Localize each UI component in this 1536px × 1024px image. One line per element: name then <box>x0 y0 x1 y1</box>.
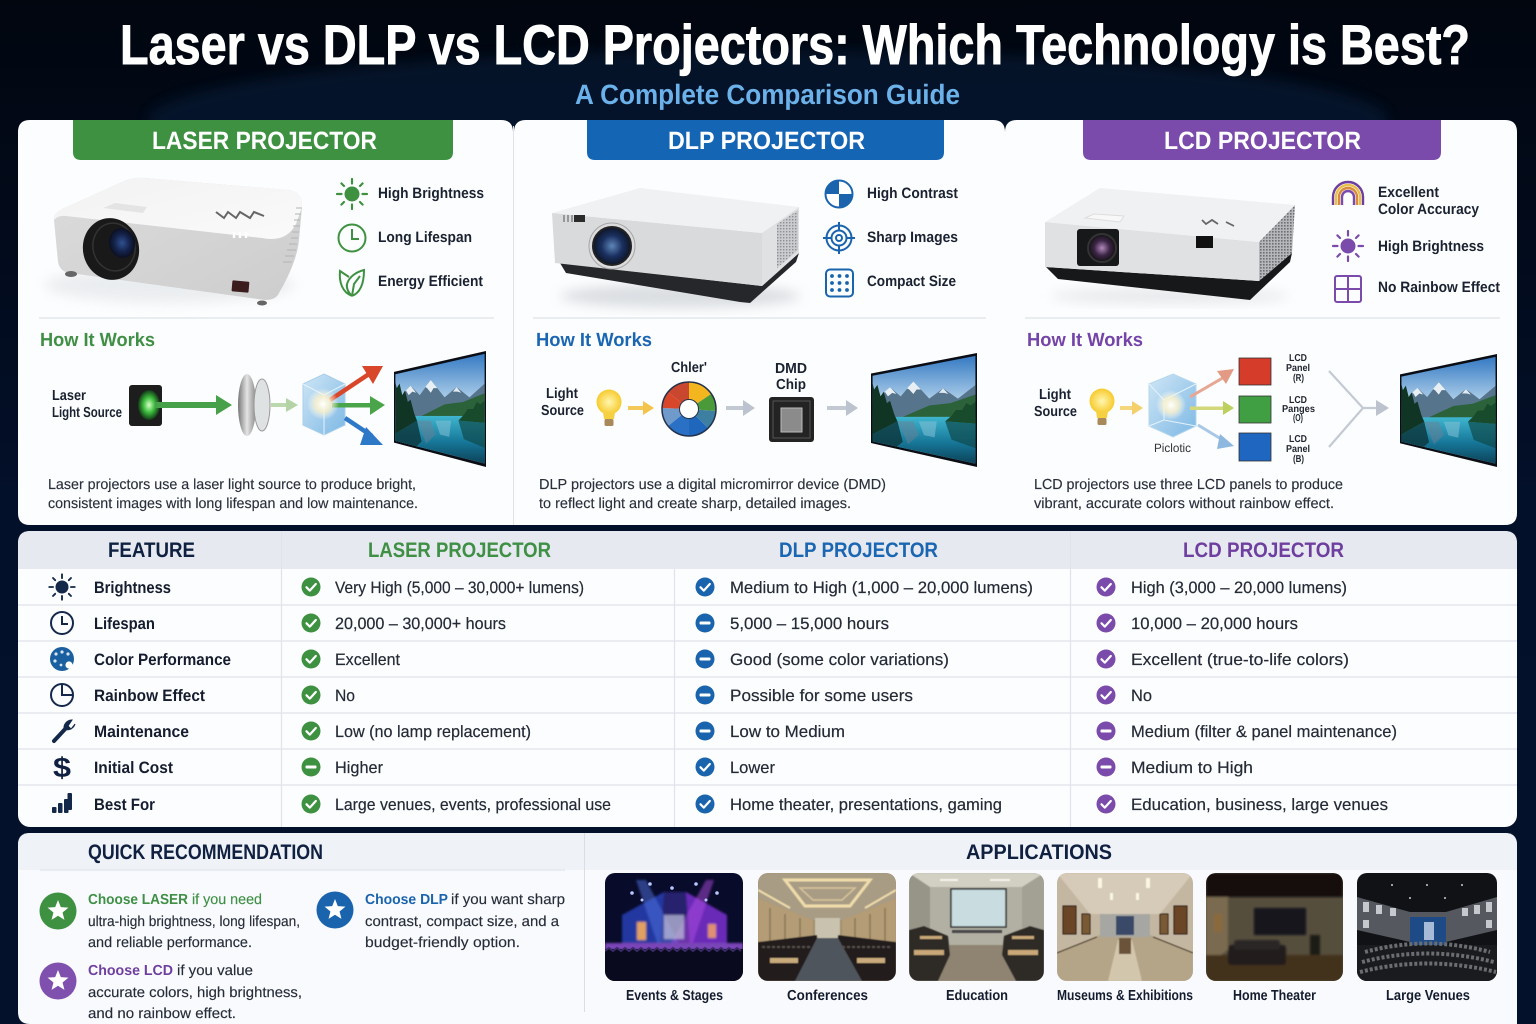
application: events and stages: Events & Stages <box>626 988 723 1004</box>
row: brightness <box>49 574 1347 600</box>
text: laser description: consistent images with long lifespan and low maintenance. <box>48 496 418 512</box>
recommendation: dlp <box>316 892 565 951</box>
feature: long lifespan <box>338 224 472 252</box>
recommendation: laser: if you need <box>192 892 262 908</box>
screen: mountain lake image <box>871 353 977 467</box>
diagram: lcd light path: LCD <box>1289 395 1307 406</box>
feature: long lifespan: Long Lifespan <box>378 229 472 246</box>
row: initial cost <box>53 752 1253 783</box>
recommendation: lcd: Choose LCD <box>88 963 173 979</box>
row: initial cost: Lower <box>730 759 775 777</box>
diagram: lcd light path: Light <box>1039 387 1071 403</box>
row: initial cost: Medium to High <box>1131 759 1253 777</box>
feature: high brightness <box>1333 231 1484 261</box>
image: laser projector <box>45 178 302 306</box>
comparison table <box>18 531 1517 827</box>
feature: excellent color accuracy: Color Accuracy <box>1378 201 1480 218</box>
row: rainbow effect: No <box>335 687 355 705</box>
recommendation: laser: ultra-high brightness, long lifespan, <box>88 914 300 930</box>
application: museums and exhibitions: Museums & Exhibitions <box>1057 988 1193 1004</box>
heading: lcd projector: LCD PROJECTOR <box>1164 127 1361 155</box>
diagram: dlp light path: Source <box>541 403 584 419</box>
application: large venues <box>1357 873 1497 1004</box>
table header row: DLP PROJECTOR <box>779 539 938 562</box>
screen: mountain lake image <box>394 351 486 467</box>
text: lcd description: LCD projectors use three LCD panels to produce <box>1034 477 1343 493</box>
row: color performance: Excellent <box>335 651 400 669</box>
row: brightness: Very High (5,000 – 30,000+ lumens) <box>335 579 584 597</box>
application: museums and exhibitions <box>1057 873 1193 1004</box>
application: home theater: Home Theater <box>1233 988 1316 1004</box>
heading: dlp projector <box>587 120 944 160</box>
text: lcd description: vibrant, accurate colors without rainbow effect. <box>1034 496 1334 512</box>
image: lcd projector <box>1045 188 1295 304</box>
row: maintenance: Maintenance <box>94 723 189 741</box>
row: rainbow effect: Rainbow Effect <box>94 687 205 705</box>
row: rainbow effect <box>51 684 1152 706</box>
panel: dlp projector <box>514 120 1005 525</box>
recommendation: laser: Choose LASER <box>88 892 188 908</box>
table header row: LASER PROJECTOR <box>368 539 551 562</box>
diagram: lcd light path: Panel <box>1286 363 1310 374</box>
row: lifespan: Lifespan <box>94 615 155 633</box>
panel: lcd projector <box>1005 120 1517 525</box>
row: initial cost: $ <box>53 752 71 783</box>
feature: high contrast <box>826 180 958 208</box>
diagram: lcd light path: LCD <box>1289 434 1307 445</box>
text: laser description <box>48 477 418 512</box>
application: conferences <box>758 873 896 1004</box>
text: dlp description <box>539 477 886 512</box>
diagram: dlp light path: Chip <box>776 377 806 393</box>
feature: high contrast: High Contrast <box>867 185 958 202</box>
row: lifespan: 20,000 – 30,000+ hours <box>335 615 506 633</box>
heading: dlp projector: DLP PROJECTOR <box>668 127 865 155</box>
recommendation: dlp: contrast, compact size, and a <box>365 914 560 930</box>
row: brightness: Brightness <box>94 579 171 597</box>
row: lifespan: 5,000 – 15,000 hours <box>730 615 889 633</box>
recommendation: lcd: and no rainbow effect. <box>88 1006 236 1022</box>
recommendation: dlp: Choose DLP <box>365 892 448 908</box>
feature: no rainbow effect <box>1335 276 1500 302</box>
diagram: laser light path: Laser <box>52 388 86 404</box>
diagram: lcd light path: (O) <box>1293 413 1303 424</box>
diagram: lcd light path: Piclotic <box>1154 441 1191 455</box>
text: laser description: Laser projectors use a laser light source to produce bright, <box>48 477 416 493</box>
diagram: lcd light path: LCD <box>1289 353 1307 364</box>
recommendation: lcd: if you value <box>177 963 253 979</box>
row: rainbow effect: No <box>1131 687 1152 705</box>
application: conferences: Conferences <box>787 988 868 1004</box>
recommendation: laser <box>40 892 300 951</box>
row: rainbow effect: Possible for some users <box>730 687 913 705</box>
recommendation: dlp: if you want sharp <box>451 892 565 908</box>
feature: high brightness: High Brightness <box>1378 238 1484 255</box>
heading: how it works: How It Works <box>40 330 155 351</box>
row: best for: Best For <box>94 796 156 814</box>
recommendation: lcd: accurate colors, high brightness, <box>88 985 302 1001</box>
row: color performance: Color Performance <box>94 651 231 669</box>
diagram: lcd light path: (R) <box>1293 373 1304 384</box>
diagram: laser light path <box>52 366 385 445</box>
row: color performance <box>50 647 1349 671</box>
diagram: lcd light path: (B) <box>1293 454 1304 465</box>
row: color performance: Excellent (true-to-life colors) <box>1131 651 1349 669</box>
heading: how it works: How It Works <box>1027 330 1143 351</box>
diagram: dlp light path: Light <box>546 386 578 402</box>
feature: compact size: Compact Size <box>867 273 956 290</box>
table header row: LCD PROJECTOR <box>1183 539 1344 562</box>
subtitle: A Complete Comparison Guide <box>575 79 960 110</box>
row: best for: Home theater, presentations, gaming <box>730 796 1002 814</box>
diagram: dlp light path <box>541 360 858 442</box>
diagram: lcd light path: Source <box>1034 404 1077 420</box>
feature: sharp images: Sharp Images <box>867 229 958 246</box>
row: lifespan: 10,000 – 20,000 hours <box>1131 615 1298 633</box>
diagram: dlp light path: Chler' <box>671 360 707 376</box>
feature: energy efficient <box>340 270 483 296</box>
heading: quick recommendation: QUICK RECOMMENDATION <box>88 841 323 864</box>
feature: excellent color accuracy <box>1333 182 1480 218</box>
feature: sharp images <box>823 222 958 254</box>
row: brightness: High (3,000 – 20,000 lumens) <box>1131 579 1347 597</box>
row: brightness: Medium to High (1,000 – 20,000 lumens) <box>730 579 1033 597</box>
heading: laser projector: LASER PROJECTOR <box>152 127 377 155</box>
row: best for: Large venues, events, professional use <box>335 796 611 814</box>
diagram: lcd light path: Panel <box>1286 444 1310 455</box>
application: education <box>909 873 1044 1004</box>
image: dlp projector <box>552 188 800 308</box>
recommendation: lcd <box>40 962 302 1022</box>
row: maintenance: Medium (filter & panel maintenance) <box>1131 723 1397 741</box>
row: best for <box>52 793 1388 814</box>
row: initial cost: Higher <box>335 759 383 777</box>
row: maintenance: Low to Medium <box>730 723 845 741</box>
heading: how it works: How It Works <box>536 330 652 351</box>
recommendation: dlp: budget-friendly option. <box>365 935 520 951</box>
text: dlp description: to reflect light and create sharp, detailed images. <box>539 496 851 512</box>
application: events and stages <box>605 873 743 1004</box>
feature: high brightness: High Brightness <box>378 185 484 202</box>
panel: quick recommendation and applications <box>18 833 1517 1024</box>
table header row: FEATURE <box>108 539 195 562</box>
row: maintenance <box>54 720 1397 741</box>
panel: laser projector <box>18 120 513 525</box>
feature: excellent color accuracy: Excellent <box>1378 184 1439 201</box>
heading: lcd projector <box>1083 120 1441 160</box>
feature: no rainbow effect: No Rainbow Effect <box>1378 279 1500 296</box>
heading: laser projector <box>73 120 453 160</box>
text: dlp description: DLP projectors use a digital micromirror device (DMD) <box>539 477 886 493</box>
recommendation: laser: and reliable performance. <box>88 935 252 951</box>
row: initial cost: Initial Cost <box>94 759 173 777</box>
row: color performance: Good (some color variations) <box>730 651 949 669</box>
table header row <box>108 539 1344 562</box>
heading: applications: APPLICATIONS <box>966 841 1112 864</box>
feature: energy efficient: Energy Efficient <box>378 273 483 290</box>
diagram: lcd light path: Panges <box>1282 404 1315 415</box>
diagram: lcd light path <box>1034 353 1389 465</box>
diagram: dlp light path: DMD <box>775 361 807 377</box>
row: lifespan <box>51 612 1298 634</box>
application: large venues: Large Venues <box>1386 988 1470 1004</box>
text: lcd description <box>1034 477 1343 512</box>
screen: mountain lake image <box>1400 354 1497 467</box>
row: best for: Education, business, large venues <box>1131 796 1388 814</box>
diagram: laser light path: Light Source <box>52 405 122 421</box>
feature: compact size <box>826 270 956 296</box>
row: maintenance: Low (no lamp replacement) <box>335 723 531 741</box>
feature: high brightness <box>337 179 484 209</box>
application: home theater <box>1206 873 1343 1004</box>
application: education: Education <box>946 988 1008 1004</box>
